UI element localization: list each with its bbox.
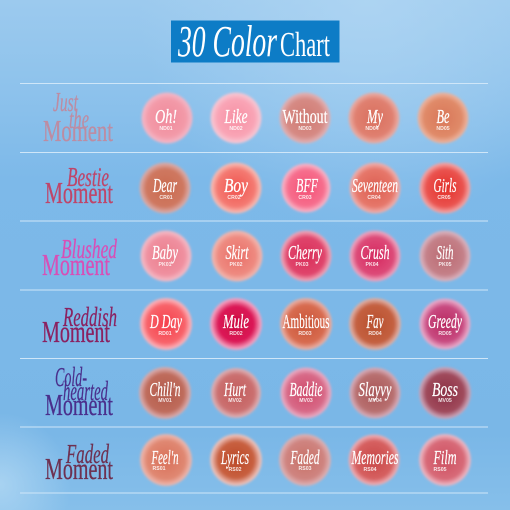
swatch: Cherry PK03: Cherry — [288, 242, 322, 264]
swatch: Crush PK04 — [349, 230, 401, 282]
category label: Reddish Moment — [42, 302, 117, 349]
swatch: Boy CR02: Boy — [224, 175, 248, 197]
swatch: Memories RS04 — [348, 434, 400, 486]
swatch: Sith PK05: PK05 — [439, 262, 452, 268]
swatch: Feel'n RS01: RS01 — [153, 466, 166, 472]
swatch: Oh! ND01: ND01 — [159, 126, 173, 132]
row: Blushed Moment — [42, 230, 471, 282]
swatch: BFF CR03: CR03 — [298, 195, 312, 201]
swatch: D Day RD01: RD01 — [158, 331, 172, 337]
swatch: Fav RD04: RD04 — [368, 331, 382, 337]
category label: Reddish Moment: Moment — [42, 314, 110, 349]
category label: Faded Moment: Moment — [45, 451, 113, 486]
swatch: Oh! ND01 — [141, 92, 193, 144]
category label: Blushed Moment: Moment — [42, 247, 110, 282]
swatch: Mule RD02: Mule — [222, 311, 249, 333]
swatch: Baddie MV03: Baddie — [290, 379, 323, 401]
swatch: Hurt MV02: MV02 — [228, 398, 242, 404]
swatch: Like ND02 — [210, 92, 262, 144]
category label: Bestie Moment: Moment — [45, 175, 113, 210]
swatch: Ambitious RD03: Ambitious — [282, 311, 330, 333]
swatch: Be ND05 — [417, 92, 469, 144]
swatch: Faded RS03: RS03 — [299, 466, 312, 472]
swatch: Film RS05 — [418, 434, 472, 486]
swatch: Faded RS03: Faded — [290, 447, 320, 469]
swatch: Dear CR01: CR01 — [159, 195, 173, 201]
swatch: Mule RD02: RD02 — [229, 331, 243, 337]
swatch: Without ND03 — [279, 92, 331, 144]
category label: Bestie Moment: Bestie — [67, 162, 109, 192]
swatch: Baby PK01: Baby — [152, 242, 178, 264]
swatch: Film RS05: RS05 — [434, 467, 447, 473]
swatch: My ND04: My — [366, 106, 383, 128]
swatch: D Day RD01: D Day — [149, 311, 182, 333]
row: Cold-hearted Moment — [45, 362, 472, 422]
swatch: Memories RS04: Memories — [351, 447, 399, 469]
swatch: Chill'n MV01: MV01 — [158, 398, 172, 404]
swatch: Boss MV05 — [418, 366, 472, 420]
swatch: Memories RS04: RS04 — [364, 467, 377, 473]
swatch: Boy CR02: CR02 — [227, 195, 241, 201]
swatch: Lyrics RS02: RS02 — [229, 467, 242, 473]
swatch: D Day RD01 — [140, 298, 192, 350]
category label: Cold-hearted Moment: Cold- — [55, 362, 87, 392]
swatch: Fav RD04: Fav — [366, 311, 384, 333]
swatch: Seventeen CR04: Seventeen — [352, 175, 398, 197]
swatch: Ambitious RD03: RD03 — [298, 331, 312, 337]
swatch: Baby PK01: PK01 — [159, 262, 172, 268]
title banner: 30 Color — [177, 17, 278, 66]
category label: Faded Moment — [45, 439, 113, 486]
swatch: Greedy RD05: RD05 — [438, 331, 452, 337]
row: Reddish Moment — [42, 298, 471, 350]
swatch: Be ND05: Be — [436, 106, 450, 128]
swatch: Greedy RD05: Greedy — [428, 311, 462, 333]
swatch: Crush PK04: PK04 — [366, 262, 379, 268]
swatch: Hurt MV02 — [210, 368, 262, 418]
swatch: Dear CR01 — [139, 162, 191, 214]
swatch: Ambitious RD03 — [280, 298, 332, 350]
swatch: Girls CR05 — [419, 162, 471, 214]
swatch: Chill'n MV01 — [138, 366, 192, 420]
swatch: Girls CR05: CR05 — [437, 195, 451, 201]
category label: Bestie Moment — [45, 162, 113, 210]
swatch: Be ND05: ND05 — [436, 126, 450, 132]
swatch: Slayvy MV04: MV04 — [368, 398, 382, 404]
swatch: Fav RD04 — [348, 298, 402, 350]
swatch: Without ND03: Without — [282, 106, 328, 128]
swatch: Boy CR02 — [210, 162, 262, 214]
swatch: Film RS05: Film — [433, 447, 456, 469]
swatch: Dear CR01: Dear — [152, 175, 177, 197]
swatch: Feel'n RS01: Feel'n — [151, 447, 178, 469]
swatch: Lyrics RS02: Lyrics — [220, 447, 249, 469]
swatch: My ND04 — [348, 92, 400, 144]
category label: Cold-hearted Moment — [45, 362, 113, 422]
category label: Just the Moment: Moment — [43, 113, 113, 148]
swatch: Baddie MV03: MV03 — [299, 398, 313, 404]
swatch: Girls CR05: Girls — [434, 175, 457, 197]
category label: Cold-hearted Moment: hearted — [63, 376, 108, 406]
swatch: Like ND02: Like — [224, 106, 248, 128]
swatch: Seventeen CR04 — [349, 162, 401, 214]
swatch: Baddie MV03 — [280, 367, 332, 419]
category label: Faded Moment: Faded — [65, 439, 109, 469]
swatch: Faded RS03 — [278, 434, 332, 486]
category label: Just the Moment — [43, 87, 113, 148]
swatch: Boss MV05: Boss — [432, 379, 458, 401]
swatch: Cherry PK03: PK03 — [296, 262, 309, 268]
swatch: Oh! ND01: Oh! — [155, 106, 177, 128]
row: Bestie Moment — [45, 162, 471, 214]
swatch: Skirt PK02: PK02 — [230, 262, 243, 268]
swatch: Feel'n RS01 — [140, 434, 192, 486]
row: Just the Moment — [43, 87, 469, 148]
swatch: Baby PK01 — [140, 230, 192, 282]
category label: Just the Moment: the — [69, 104, 89, 134]
category label: Cold-hearted Moment: Moment — [45, 387, 113, 422]
swatch: Like ND02: ND02 — [229, 126, 243, 132]
swatch: Lyrics RS02 — [210, 434, 262, 486]
title banner: Chart — [280, 25, 330, 64]
swatch: Without ND03: ND03 — [298, 126, 312, 132]
swatch: Slayvy MV04: Slayvy — [358, 379, 392, 401]
swatch: Greedy RD05 — [419, 298, 471, 350]
swatch: Mule RD02 — [210, 298, 262, 350]
swatch: BFF CR03 — [281, 163, 331, 213]
swatch: Seventeen CR04: CR04 — [367, 195, 381, 201]
category label: Blushed Moment: Blushed — [61, 234, 117, 264]
swatch: Skirt PK02 — [211, 230, 263, 282]
swatch: My ND04: ND04 — [365, 126, 379, 132]
swatch: Slayvy MV04 — [349, 367, 401, 419]
swatch: Sith PK05: Sith — [436, 242, 454, 264]
swatch: Sith PK05 — [419, 230, 471, 282]
row: Faded Moment — [45, 434, 472, 486]
swatch: Chill'n MV01: Chill'n — [150, 379, 180, 401]
swatch: Boss MV05: MV05 — [438, 398, 452, 404]
swatch: Skirt PK02: Skirt — [226, 242, 249, 264]
swatch: Cherry PK03 — [280, 230, 332, 282]
swatch: Crush PK04: Crush — [360, 242, 390, 264]
swatch: Hurt MV02: Hurt — [223, 379, 246, 401]
swatch: BFF CR03: BFF — [296, 175, 318, 197]
category label: Just the Moment: Just — [53, 87, 79, 117]
category label: Blushed Moment — [42, 234, 117, 282]
category label: Reddish Moment: Reddish — [62, 302, 117, 332]
